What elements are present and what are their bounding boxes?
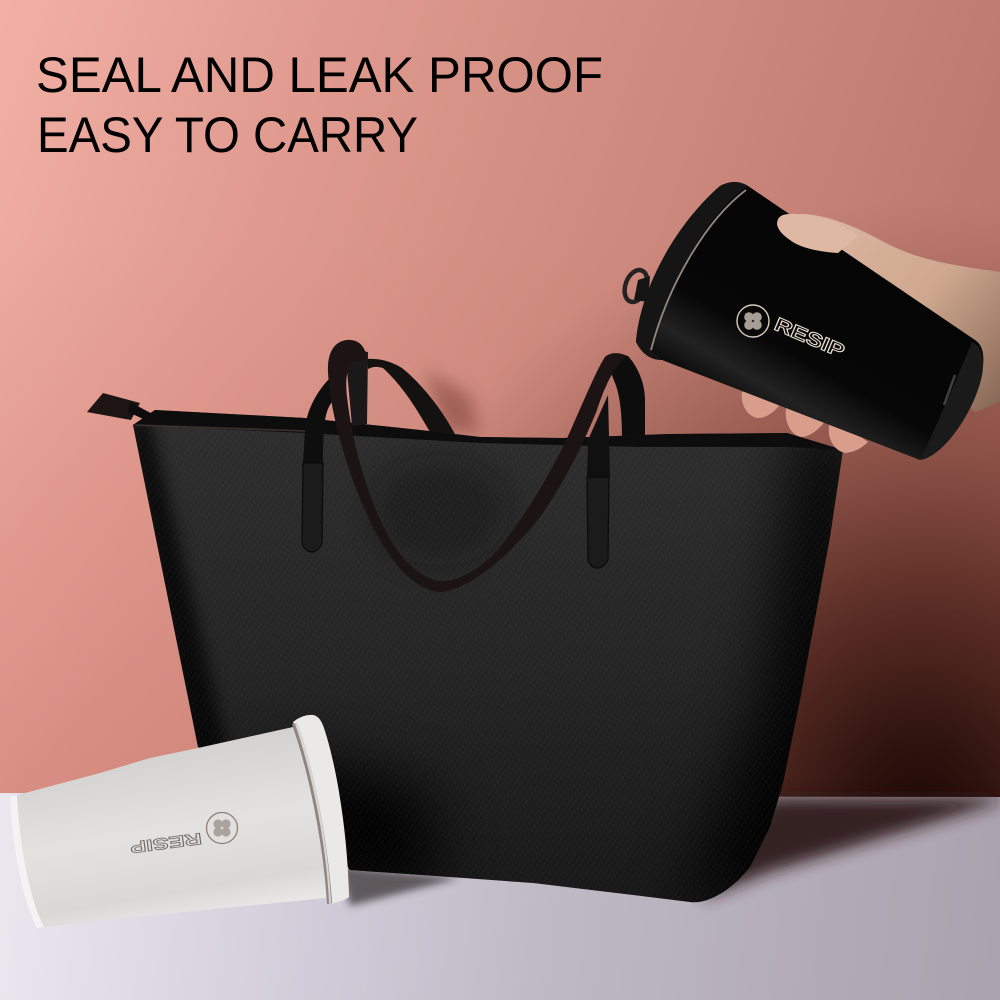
white cup logo <box>129 812 238 855</box>
handle shadow on wall <box>425 370 480 432</box>
hand behind cup <box>742 214 1000 453</box>
cup base <box>920 342 983 460</box>
lavender floor <box>0 793 1000 1000</box>
bag body <box>120 400 860 910</box>
line 2: EASY TO CARRY <box>37 107 418 163</box>
brand name: RESIP <box>771 314 848 363</box>
shading left edge <box>133 419 228 748</box>
cup loop <box>620 267 652 305</box>
lid <box>636 182 748 360</box>
shading lower left <box>330 748 462 878</box>
back handle right <box>605 354 645 436</box>
thumb over cup <box>777 214 858 253</box>
base highlight <box>944 375 955 405</box>
rim stitching <box>135 425 305 431</box>
black cup logo <box>737 305 848 363</box>
front handle <box>328 340 627 592</box>
zip tab <box>87 393 160 423</box>
left tab strap <box>302 378 332 552</box>
bag shadow on floor <box>340 797 1000 906</box>
fingers <box>742 388 782 418</box>
emblem <box>206 812 238 844</box>
brand name: RESIP <box>129 829 203 855</box>
lid <box>293 715 349 904</box>
bag top flap <box>133 410 843 450</box>
upper left handle back strip <box>345 348 368 426</box>
emblem <box>737 305 769 337</box>
right tab strap <box>587 395 610 568</box>
line 1: SEAL AND LEAK PROOF <box>36 47 603 103</box>
cup body <box>10 727 326 928</box>
cup body <box>636 182 983 460</box>
black cup <box>636 182 983 460</box>
cup base edge <box>10 795 44 928</box>
steel ring <box>292 723 332 904</box>
white cup <box>10 715 349 928</box>
shading right <box>676 436 843 902</box>
headline <box>36 47 603 163</box>
shading centre <box>384 467 496 550</box>
palm <box>800 214 1000 412</box>
pink wall background <box>0 0 1000 800</box>
steel ring <box>651 190 746 350</box>
back handle left <box>367 359 455 434</box>
black tote bag <box>87 340 860 910</box>
